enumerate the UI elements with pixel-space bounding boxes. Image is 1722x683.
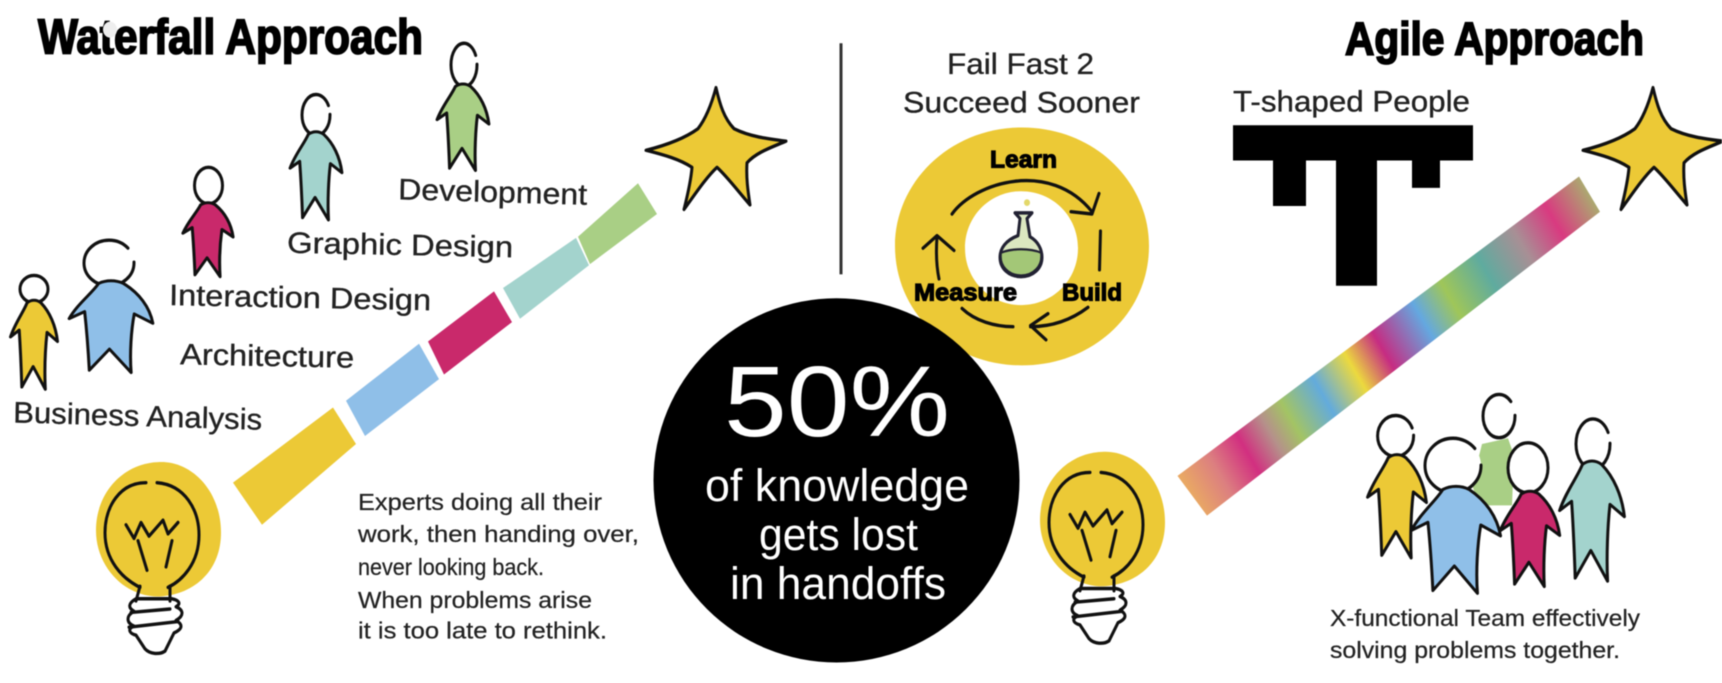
icon: flask	[1000, 199, 1042, 277]
label: T-shaped People: T-shaped People	[1233, 85, 1470, 118]
heading: fail fast: Fail Fast 2	[947, 47, 1094, 80]
person: interaction design	[183, 167, 233, 277]
text block: waterfall description: When problems arise	[358, 588, 592, 613]
icon: lightbulb waterfall	[96, 462, 221, 653]
person: graphic design	[290, 94, 342, 220]
waterfall stepped bar	[233, 183, 657, 525]
heading: fail fast: Succeed Sooner	[903, 86, 1140, 119]
icon: star waterfall	[646, 88, 786, 209]
cycle labels	[914, 146, 1122, 306]
callout: 50 percent	[654, 298, 1020, 663]
heading: fail fast	[903, 47, 1140, 119]
label: Development: Development	[398, 173, 588, 211]
icon: lightbulb agile	[1040, 452, 1165, 643]
label: Interaction Design: Interaction Design	[169, 279, 431, 317]
label: Business Analysis: Business Analysis	[13, 396, 263, 436]
cycle labels: Build	[1062, 279, 1122, 306]
text block: team description: X-functional Team effectively	[1330, 606, 1640, 631]
person: architecture	[69, 240, 153, 373]
text block: waterfall description: work, then handing over,	[357, 522, 639, 547]
callout: 50 percent: gets lost	[759, 509, 918, 560]
text block: waterfall description: Experts doing all their	[358, 490, 602, 515]
text block: waterfall description	[357, 490, 639, 644]
yellow ring	[895, 127, 1149, 365]
callout: 50 percent: 50%	[724, 346, 950, 457]
label: Architecture: Architecture	[180, 338, 354, 374]
icon: star agile	[1583, 88, 1722, 209]
icon: T-shape bars	[1233, 125, 1473, 286]
callout: 50 percent: of knowledge	[705, 460, 969, 511]
title: Waterfall Approach: Waterfall Approach	[38, 9, 423, 64]
person: team teal	[1560, 419, 1624, 581]
team of people	[1368, 394, 1624, 593]
agile rainbow bar	[1178, 176, 1600, 516]
person: development	[437, 43, 489, 170]
person: business analysis	[11, 275, 57, 389]
person: team green	[1472, 394, 1515, 505]
cycle arrows	[923, 181, 1100, 340]
divider	[840, 43, 842, 274]
person: team yellow	[1368, 415, 1426, 558]
panel: fail fast	[895, 47, 1149, 365]
text block: team description	[1330, 606, 1640, 663]
text block: waterfall description: never looking back.	[358, 555, 544, 580]
label: Graphic Design: Graphic Design	[287, 226, 513, 264]
person: team crimson	[1500, 443, 1560, 587]
cycle labels: Measure	[914, 279, 1017, 306]
text block: team description: solving problems together.	[1330, 638, 1620, 663]
callout: 50 percent: in handoffs	[730, 558, 946, 609]
cycle labels: Learn	[990, 146, 1057, 173]
text block: waterfall description: it is too late to rethink.	[358, 618, 607, 644]
person: team blue	[1411, 438, 1501, 593]
title: Agile Approach: Agile Approach	[1345, 13, 1644, 65]
